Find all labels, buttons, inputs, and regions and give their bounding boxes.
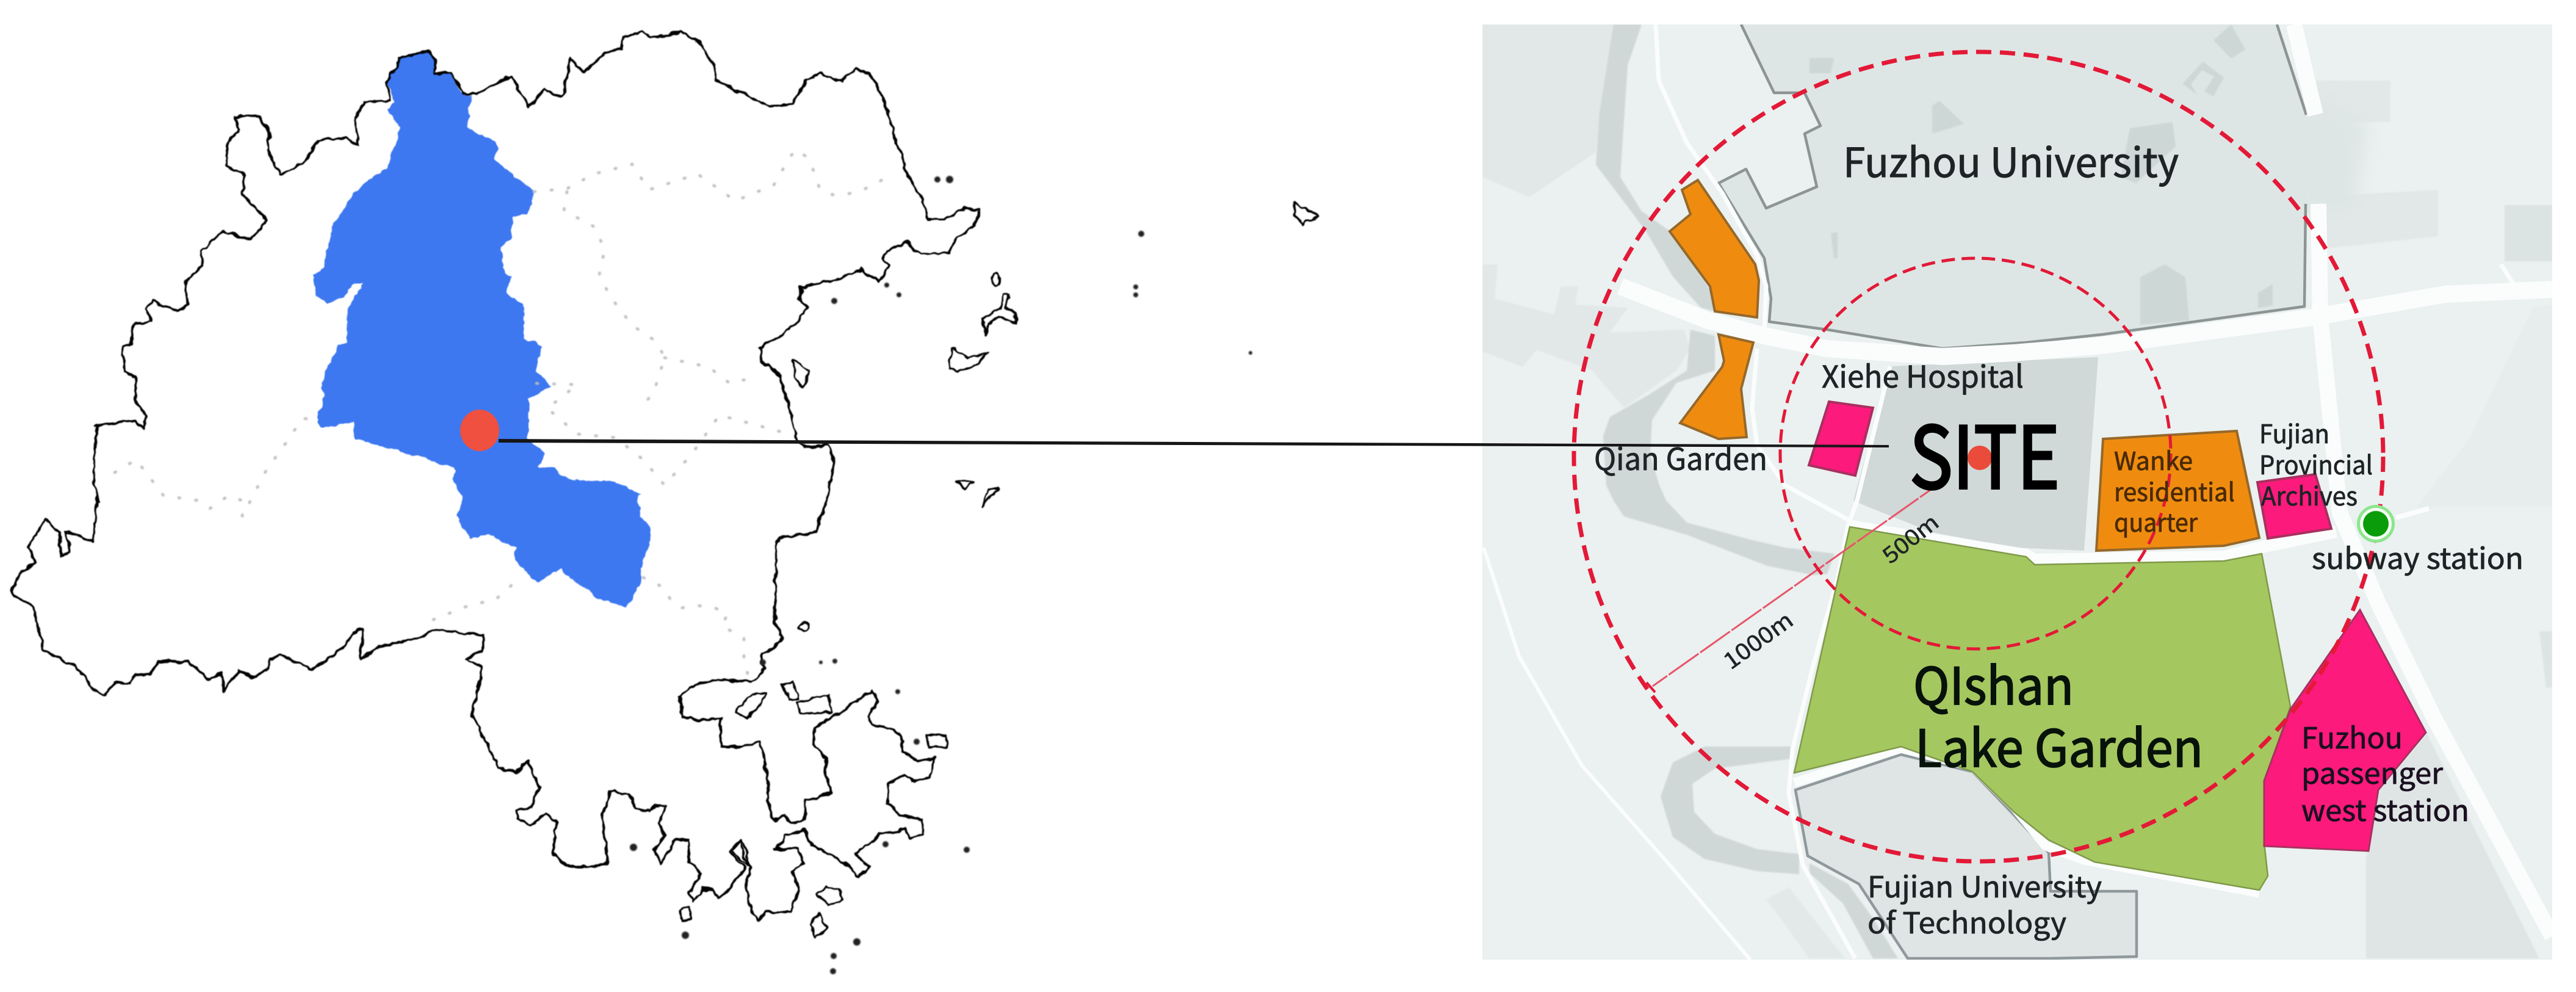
label: Wanke residential quarter: quarter — [2114, 502, 2198, 539]
area: Fujian Provincial Archives — [2257, 474, 2331, 538]
marker: site centre — [1968, 446, 1992, 470]
area: Qian Garden north parcel — [1670, 180, 1759, 317]
icon: subway station — [2357, 505, 2395, 543]
label: Fujian University of Technology: Fujian University — [1867, 863, 2102, 906]
label: Fujian Provincial Archives: Fujian — [2259, 414, 2329, 451]
label: Xiehe Hospital: Xiehe Hospital — [1822, 353, 2024, 397]
label: Fuzhou passenger west station: passenger — [2301, 750, 2443, 792]
label: QIshan Lake Garden: Lake Garden — [1915, 708, 2203, 782]
area: QIshan Lake Garden — [1794, 527, 2290, 890]
surrounding blocks — [1482, 24, 2552, 958]
marker: site location on regional map — [460, 410, 499, 451]
map background — [1482, 24, 2552, 960]
label: Fujian University of Technology: of Technology — [1867, 899, 2066, 942]
label: subway station: subway station — [2312, 535, 2524, 577]
panel: site context map — [1482, 24, 2552, 960]
label: SITE: SITE — [1910, 390, 2060, 513]
area: Fuzhou passenger west station — [2264, 610, 2426, 851]
coastline and provincial outline — [12, 31, 980, 921]
label: Wanke residential quarter: Wanke — [2114, 441, 2193, 477]
connector line from district to site — [499, 439, 1889, 447]
area: Wanke residential quarter — [2096, 431, 2259, 551]
campus tree patches — [1809, 24, 2273, 325]
label: Fuzhou University: Fuzhou University — [1843, 131, 2179, 189]
label: QIshan Lake Garden: QIshan — [1913, 646, 2074, 720]
label: 1000m: 1000m — [1716, 603, 1799, 676]
label: 500m: 500m — [1875, 505, 1945, 570]
label: Qian Garden: Qian Garden — [1594, 435, 1767, 479]
block: site parcel — [1853, 357, 2098, 551]
area: Xiehe Hospital — [1809, 402, 1873, 476]
label: Fujian Provincial Archives: Provincial — [2259, 445, 2373, 482]
small island specks — [630, 176, 1252, 974]
circle: 500 m radius — [1780, 258, 2171, 649]
river channels — [1596, 24, 1898, 958]
circle: 1000 m radius — [1574, 52, 2383, 861]
block: Fuzhou University campus — [1719, 24, 2368, 349]
label: Wanke residential quarter: residential — [2114, 472, 2235, 509]
soft fade on the campus east side — [2301, 93, 2362, 212]
highlighted district in blue — [313, 51, 650, 607]
label: Fuzhou passenger west station: west station — [2301, 787, 2469, 830]
road network — [1484, 24, 2552, 960]
label: Fujian Provincial Archives: Archives — [2261, 476, 2358, 513]
internal district boundaries — [115, 150, 894, 673]
block: Fujian University of Technology campus — [1795, 755, 2137, 958]
label: Fuzhou passenger west station: Fuzhou — [2301, 714, 2403, 757]
radius line — [1647, 476, 1950, 692]
panel: regional map of Fuzhou — [12, 31, 1319, 974]
area: Qian Garden south parcel — [1680, 335, 1753, 439]
offshore islands — [680, 203, 1319, 939]
